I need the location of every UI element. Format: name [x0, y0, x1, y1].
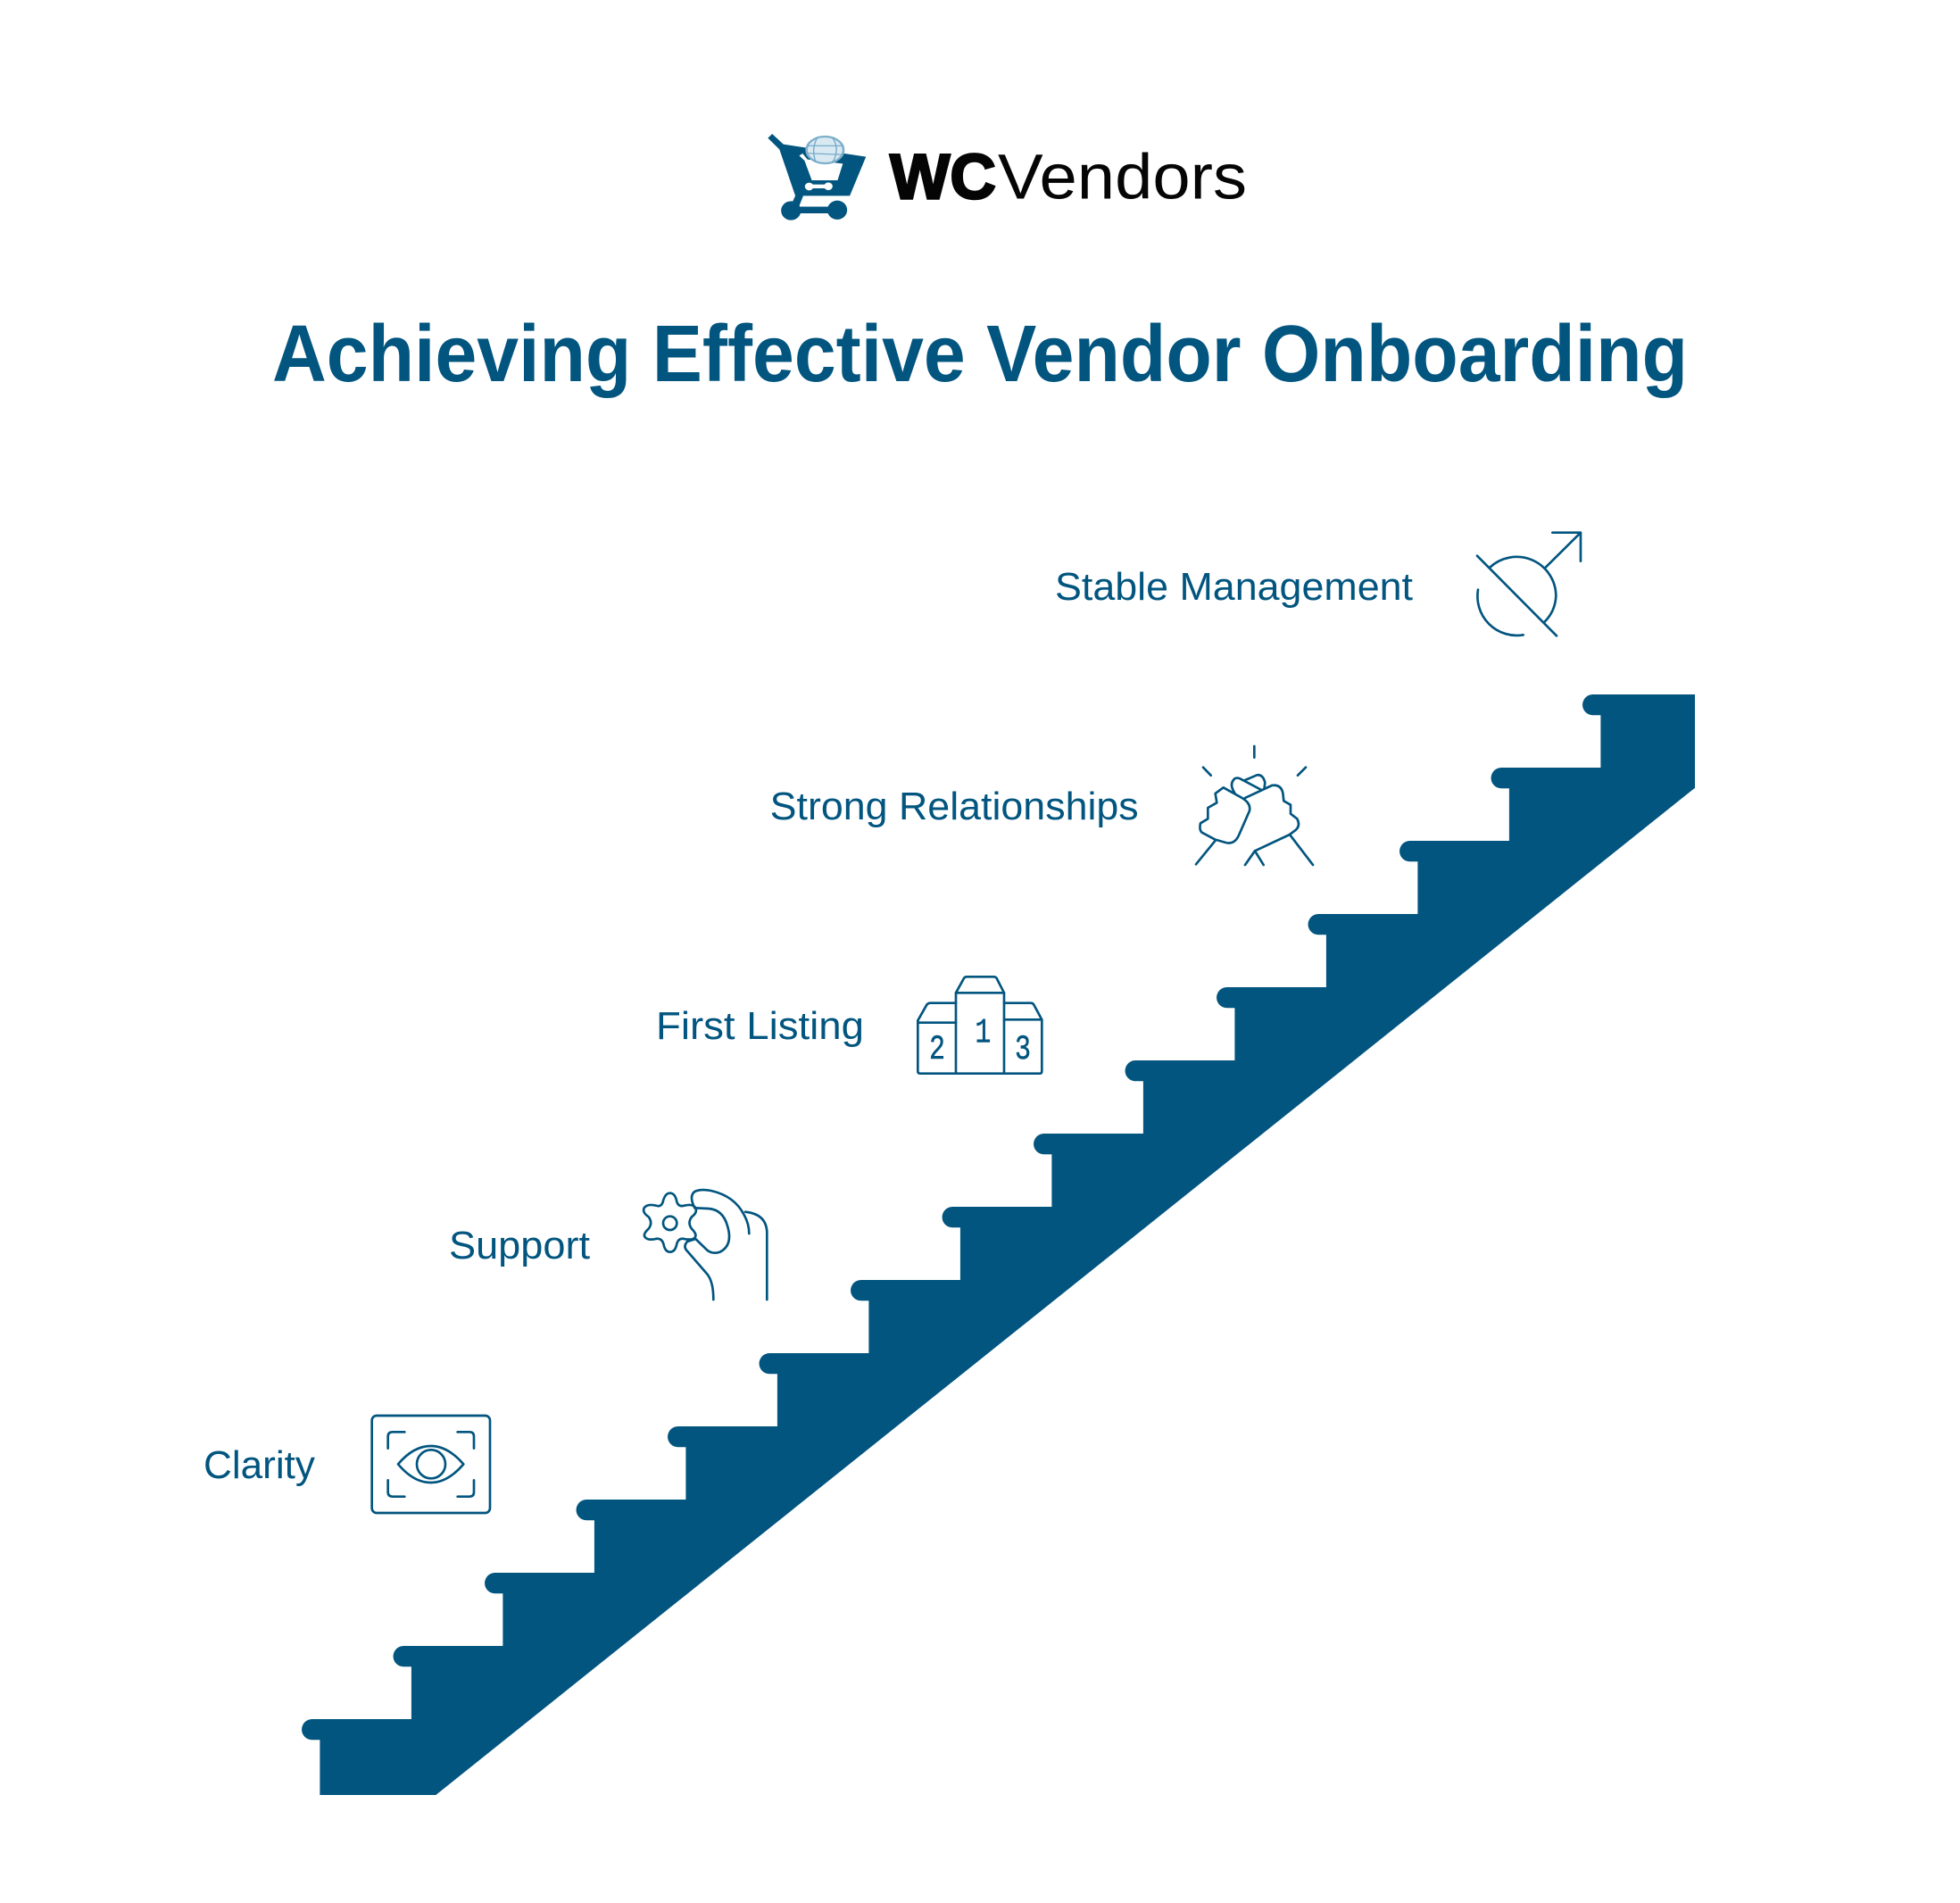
label: First Listing: First Listing: [656, 1004, 864, 1048]
label: Clarity: Clarity: [203, 1443, 315, 1487]
label: Support: Support: [449, 1224, 590, 1267]
wordmark: WC: [890, 143, 996, 212]
icon: podium: [918, 976, 1042, 1074]
wordmark: [890, 143, 1247, 212]
icon: clasped hands: [1196, 746, 1313, 865]
staircase: [302, 694, 1695, 1795]
icon: crossed-out circle with arrow: [1477, 533, 1581, 636]
label: Strong Relationships: Strong Relationships: [770, 785, 1139, 828]
icon: podium: 2: [929, 1029, 945, 1069]
icon: eye in frame: [372, 1416, 490, 1513]
wordmark: Vendors: [998, 143, 1247, 212]
icon: shopping cart with globe: [768, 134, 866, 220]
title: Achieving Effective Vendor Onboarding: [272, 310, 1688, 399]
label: Stable Management: Stable Management: [1055, 565, 1413, 609]
icon: podium: 1: [975, 1012, 991, 1052]
icon: hand holding gear: [644, 1190, 767, 1300]
icon: podium: 3: [1015, 1029, 1031, 1069]
logo: WC Vendors cart and wordmark: [768, 134, 1247, 220]
